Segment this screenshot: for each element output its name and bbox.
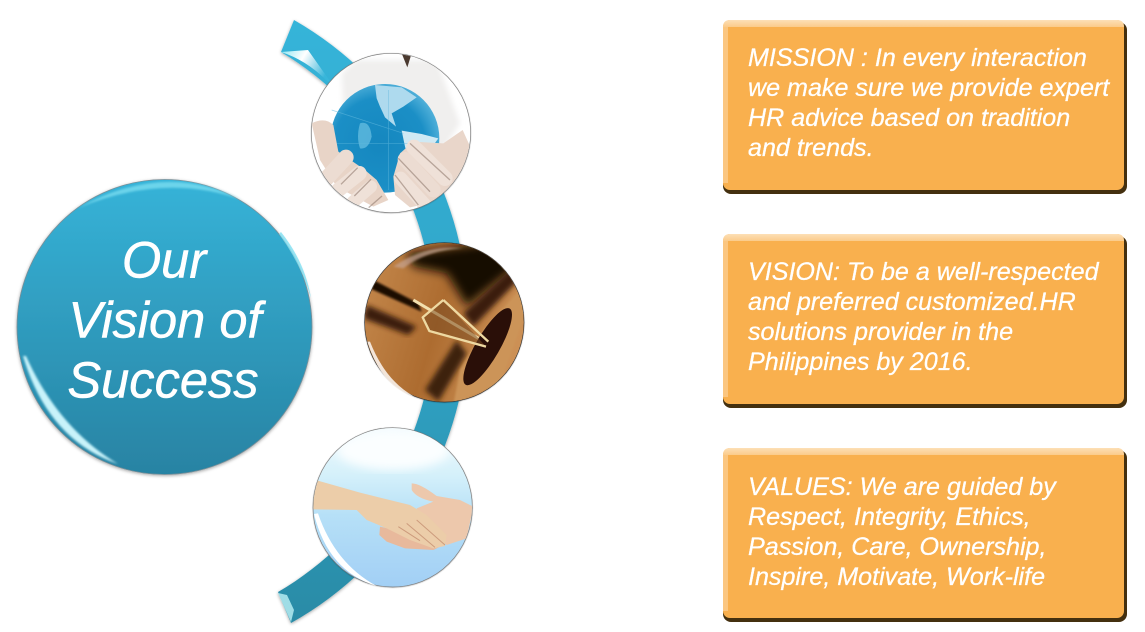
heading: Vision of xyxy=(68,292,267,348)
vision text: Philippines by 2016. xyxy=(748,348,973,376)
mission text: we make sure we provide expert xyxy=(748,74,1110,102)
values text: VALUES: We are guided by xyxy=(748,473,1057,501)
mission text: HR advice based on tradition xyxy=(748,104,1070,132)
mission text: and trends. xyxy=(748,134,874,162)
arrow photo highlight xyxy=(367,342,413,396)
arc top bevel xyxy=(281,50,332,84)
circle highlight top xyxy=(78,182,242,208)
values text xyxy=(748,473,1057,591)
heading: Our xyxy=(122,232,208,288)
main circle xyxy=(17,180,312,474)
heading xyxy=(67,232,267,408)
circle highlight right xyxy=(279,232,311,298)
panel: mission xyxy=(723,20,1127,194)
curved arc band xyxy=(278,20,468,623)
mission text xyxy=(748,44,1110,162)
values text: Respect, Integrity, Ethics, xyxy=(748,503,1031,531)
photo: two hands touching xyxy=(313,428,473,587)
mission text: MISSION : In every interaction xyxy=(748,44,1087,72)
heading: Success xyxy=(67,352,259,408)
hands photo highlight xyxy=(314,513,377,586)
values text: Passion, Care, Ownership, xyxy=(748,533,1046,561)
circle highlight bottom left xyxy=(23,356,118,464)
vision text: and preferred customized.HR xyxy=(748,288,1076,316)
panel: values xyxy=(723,448,1127,622)
values text: Inspire, Motivate, Work-life xyxy=(748,563,1045,591)
panel: vision xyxy=(723,234,1127,408)
arc bottom bevel xyxy=(278,593,294,622)
photo: arrow hitting target xyxy=(363,240,527,405)
vision text: solutions provider in the xyxy=(748,318,1013,346)
vision text xyxy=(748,258,1100,376)
photo: hands holding globe xyxy=(311,53,472,213)
vision text: VISION: To be a well-respected xyxy=(748,258,1100,286)
arrow photo top sheen xyxy=(393,247,463,268)
